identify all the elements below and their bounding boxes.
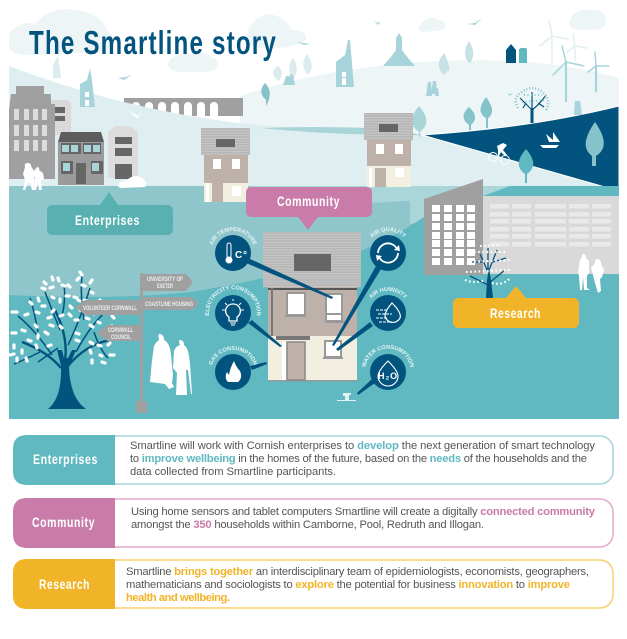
label: research	[453, 286, 579, 328]
tree: volunteers	[10, 272, 114, 409]
panel: community	[13, 498, 613, 548]
house: left	[201, 128, 250, 202]
panel: community: Community	[32, 514, 95, 530]
house: right	[364, 113, 413, 187]
research buildings	[424, 179, 619, 275]
sensor: air temperature: C°	[235, 250, 248, 261]
central house	[263, 232, 361, 382]
sensor: air temperature	[210, 227, 257, 271]
clouds	[9, 9, 606, 72]
sensor: water consumption	[362, 344, 414, 390]
panel: community: Using home sensors and tablet computers Smartline will create a digitally connected community	[131, 506, 596, 518]
panel: enterprises: data collected from Smartline participants.	[130, 466, 336, 478]
small houses	[506, 44, 527, 63]
sensor: electricity consumption	[205, 285, 261, 331]
people: elderly couple	[150, 334, 192, 395]
tree: research	[465, 245, 512, 298]
sensor: water consumption: H₂O	[378, 371, 398, 381]
signpost: EXETER	[157, 284, 173, 290]
sensor: air temperature: AIR TEMPERATURE	[210, 227, 257, 245]
sensor: gas consumption	[208, 346, 258, 390]
sensor connectors	[246, 258, 381, 395]
distant landmarks	[53, 33, 415, 107]
signpost: UNIVERSITY OF	[147, 277, 183, 283]
panel: research: Research	[39, 576, 90, 592]
bird	[130, 111, 142, 118]
signpost: CORNWALL	[108, 328, 133, 334]
signpost: COASTLINE HOUSING	[145, 302, 193, 308]
label: enterprises	[47, 192, 173, 235]
sensor: electricity consumption: ELECTRICITY CONSUMPTION	[205, 285, 261, 316]
label: enterprises: Enterprises	[75, 212, 140, 228]
sensor: air humidity: AIR HUMIDITY	[370, 287, 408, 299]
background trees	[261, 41, 604, 183]
winter tree	[516, 88, 548, 123]
dark blue wedge	[422, 106, 619, 191]
label: community	[246, 187, 372, 230]
left hill	[9, 66, 619, 200]
signpost	[75, 273, 199, 413]
wind turbines	[540, 20, 609, 101]
sensor: gas consumption: GAS CONSUMPTION	[208, 346, 258, 365]
title: The Smartline story	[29, 24, 277, 61]
car	[118, 176, 146, 188]
people: research	[578, 254, 604, 293]
panel: research: mathematicians and sociologists to explore the potential for business innovation to improve	[126, 579, 570, 591]
cyclist and boat	[488, 132, 560, 164]
people: left	[23, 163, 44, 190]
tap	[337, 393, 356, 401]
panel: research: Smartline brings together an interdisciplinary team of epidemiologists, economists, geographers,	[126, 566, 589, 578]
label: research: Research	[490, 305, 541, 321]
panel: enterprises: Smartline will work with Cornish enterprises to develop the next generation of smart technology	[130, 440, 595, 452]
panel: research	[13, 559, 613, 609]
ground layers	[9, 186, 424, 300]
left buildings	[9, 86, 138, 185]
panel: research: health and wellbeing.	[126, 592, 230, 604]
viaduct	[124, 98, 243, 116]
walkers and birds	[118, 18, 582, 115]
panel: enterprises	[13, 435, 613, 485]
sensor: air humidity	[370, 287, 408, 331]
panel: enterprises: to improve wellbeing in the homes of the future, based on the needs of the households and the	[130, 453, 587, 465]
distant hill	[240, 60, 619, 140]
label: community: Community	[277, 193, 340, 209]
panel: community: amongst the 350 households within Camborne, Pool, Redruth and Illogan.	[131, 519, 484, 531]
signpost: VOLUNTEER CORNWALL	[83, 306, 137, 312]
sensor: water consumption: WATER CONSUMPTION	[362, 344, 414, 368]
sensor: air quality: AIR QUALITY	[370, 227, 406, 238]
signpost: COUNCIL	[111, 335, 131, 341]
river sliver	[260, 127, 425, 135]
sensor: air quality	[370, 227, 406, 271]
panel: enterprises: Enterprises	[33, 451, 98, 467]
